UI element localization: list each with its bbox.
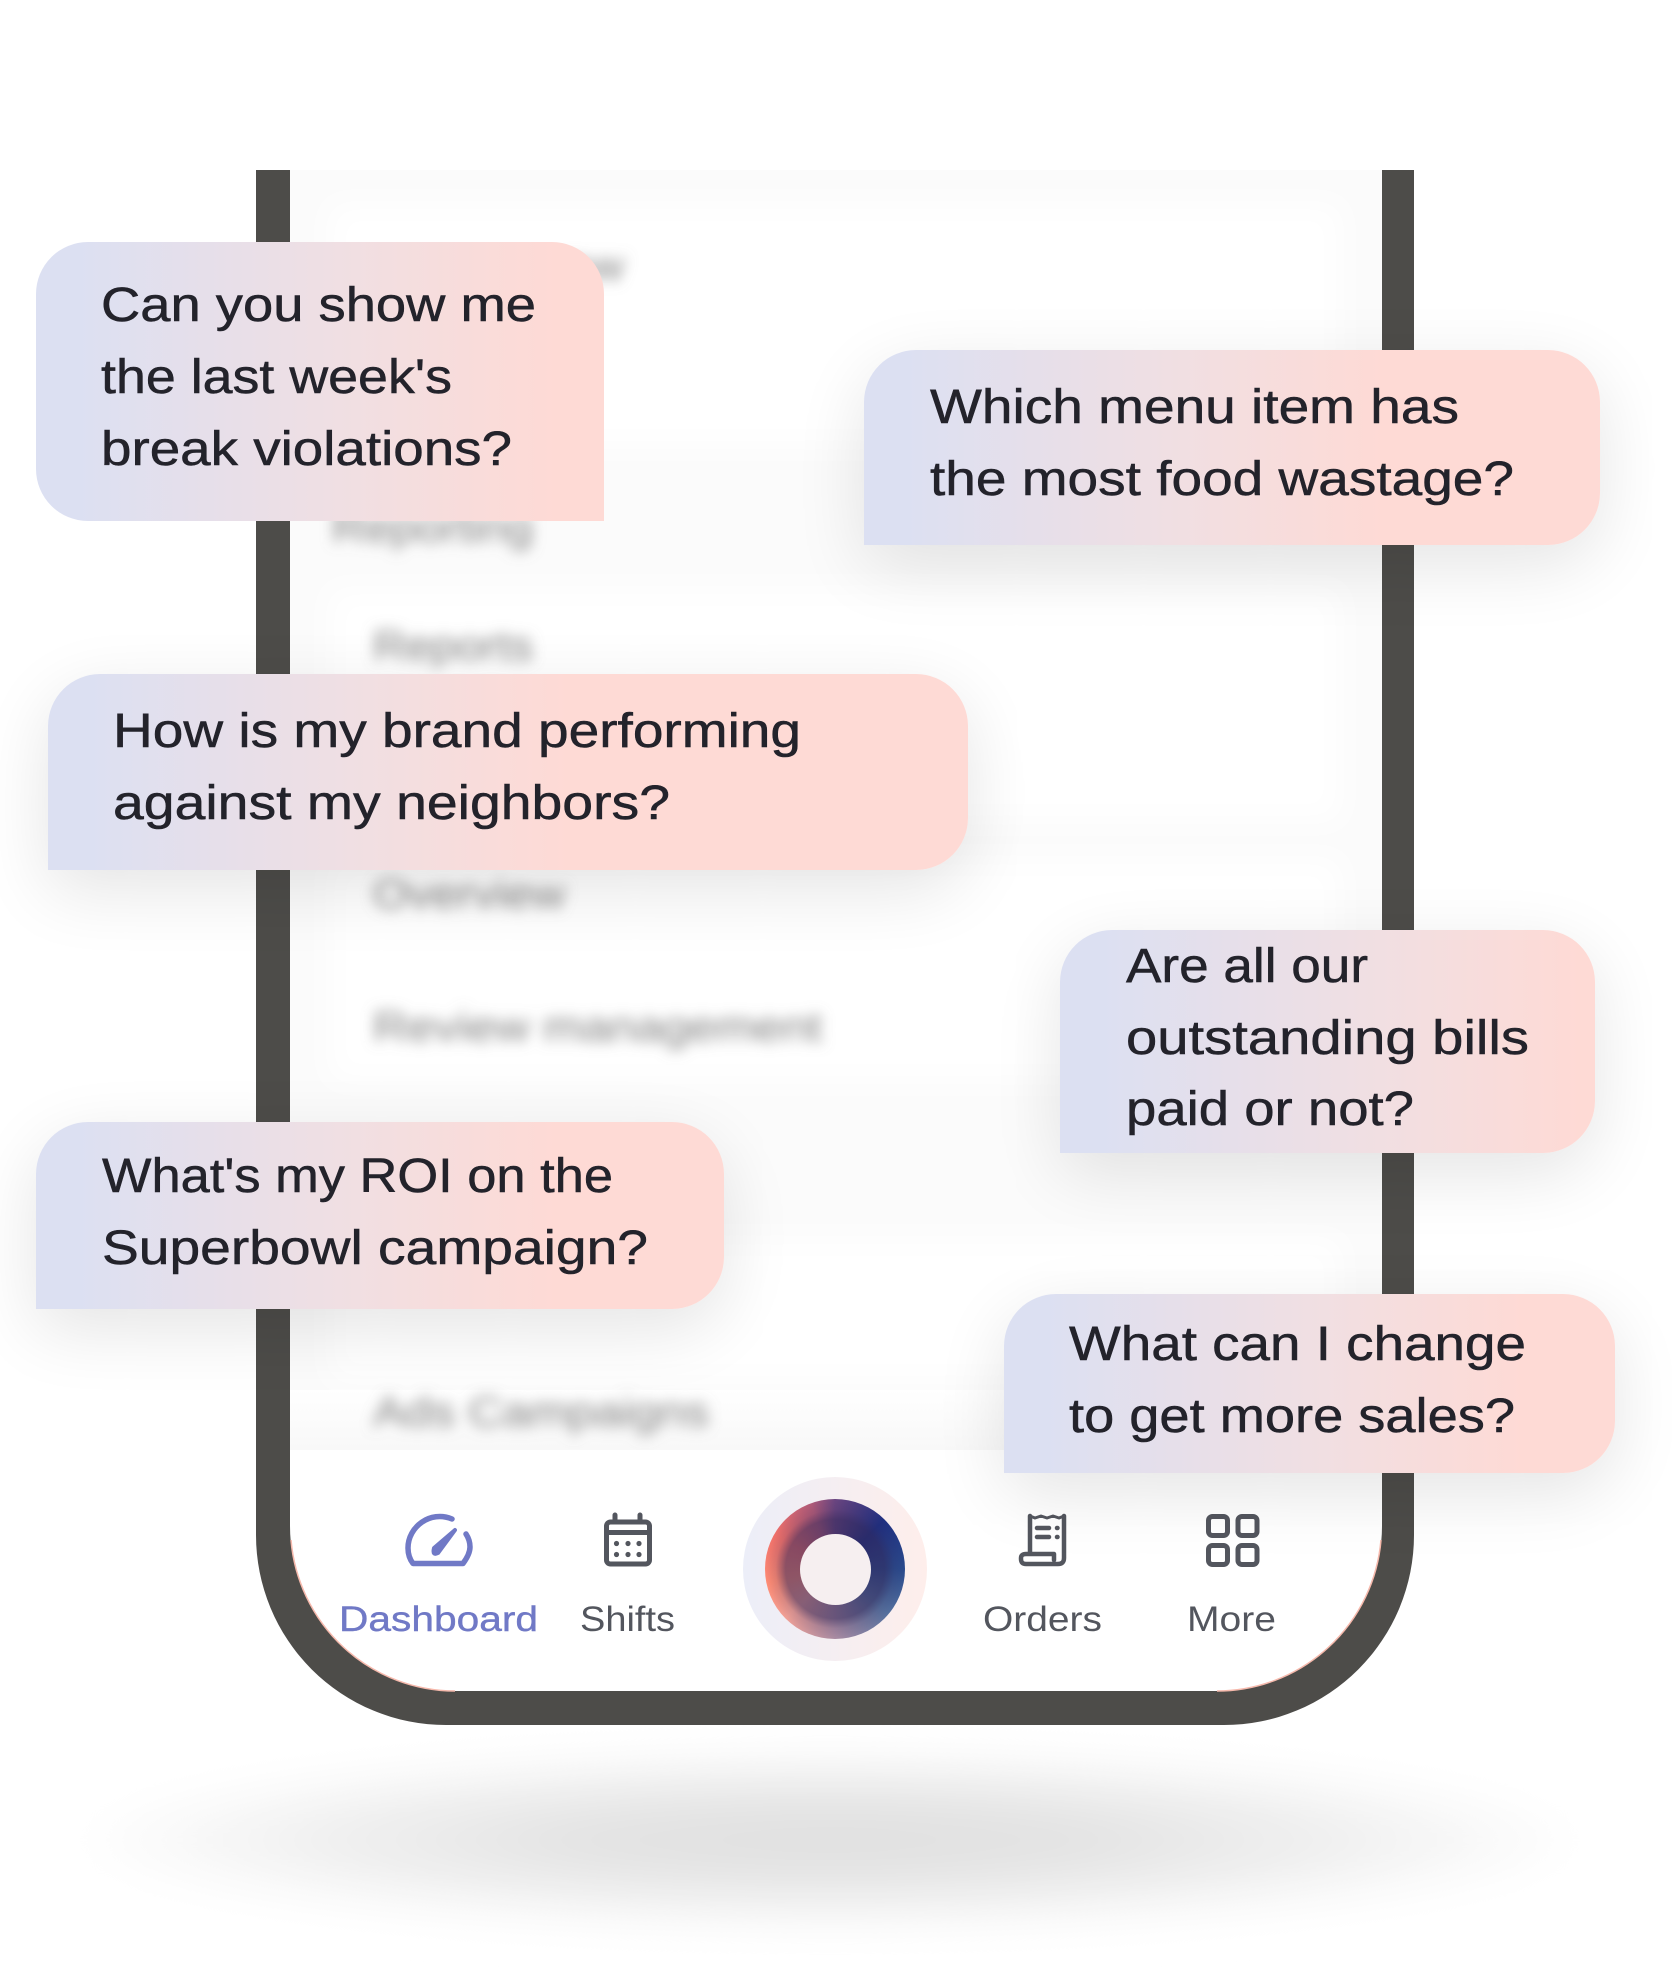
icon: dashboard gauge <box>408 1517 470 1564</box>
speech bubble: more sales: What can I change <box>1069 1318 1526 1371</box>
phone screen <box>290 170 1382 1450</box>
blurred menu text <box>332 242 822 1435</box>
blurred menu text: Overview <box>373 870 566 917</box>
ground shadow <box>70 1748 1590 1932</box>
speech bubble: break violations: Can you show me <box>101 279 536 332</box>
speech bubble: campaign ROI <box>36 1122 724 1309</box>
speech bubble: outstanding bills: outstanding bills <box>1126 1012 1529 1065</box>
label: More: More <box>1187 1600 1276 1639</box>
speech bubble: food wastage: the most food wastage? <box>930 453 1514 506</box>
speech bubble: outstanding bills <box>1060 930 1595 1153</box>
icon: central assistant donut button <box>743 1477 927 1661</box>
speech bubble: food wastage: Which menu item has <box>930 381 1459 434</box>
frame inner edge highlight <box>291 1540 1381 1691</box>
label: Orders: Orders <box>983 1600 1102 1639</box>
speech bubble: more sales <box>1004 1294 1615 1473</box>
speech bubble: break violations <box>36 242 604 521</box>
blurred menu text: ew <box>560 242 625 289</box>
speech bubble: brand performance: against my neighbors? <box>113 777 670 830</box>
speech bubble: break violations: the last week's <box>101 351 452 404</box>
blurred menu text: Review management <box>373 1003 822 1050</box>
speech bubble: outstanding bills: Are all our <box>1126 940 1368 993</box>
phone frame <box>256 170 1414 1725</box>
label: Dashboard: Dashboard <box>339 1600 538 1639</box>
speech bubble: brand performance <box>48 674 968 870</box>
speech bubble: campaign ROI: Superbowl campaign? <box>102 1222 648 1275</box>
blurred menu text: Ads Campaigns <box>373 1388 709 1435</box>
label: Shifts: Shifts <box>580 1600 675 1639</box>
speech bubble: more sales: to get more sales? <box>1069 1390 1515 1443</box>
navigation bar background <box>290 1450 1382 1691</box>
icon: shifts calendar <box>606 1515 650 1564</box>
blurred menu text: Reporting <box>332 504 533 551</box>
icon: more grid <box>1208 1516 1257 1564</box>
speech bubble: break violations: break violations? <box>101 423 512 476</box>
speech bubble: campaign ROI: What's my ROI on the <box>102 1150 613 1203</box>
blurred menu text: Reports <box>373 622 533 669</box>
icon: orders receipt <box>1021 1516 1064 1564</box>
speech bubble: food wastage <box>864 350 1600 545</box>
speech bubble: brand performance: How is my brand performing <box>113 705 801 758</box>
speech bubble: outstanding bills: paid or not? <box>1126 1083 1414 1136</box>
